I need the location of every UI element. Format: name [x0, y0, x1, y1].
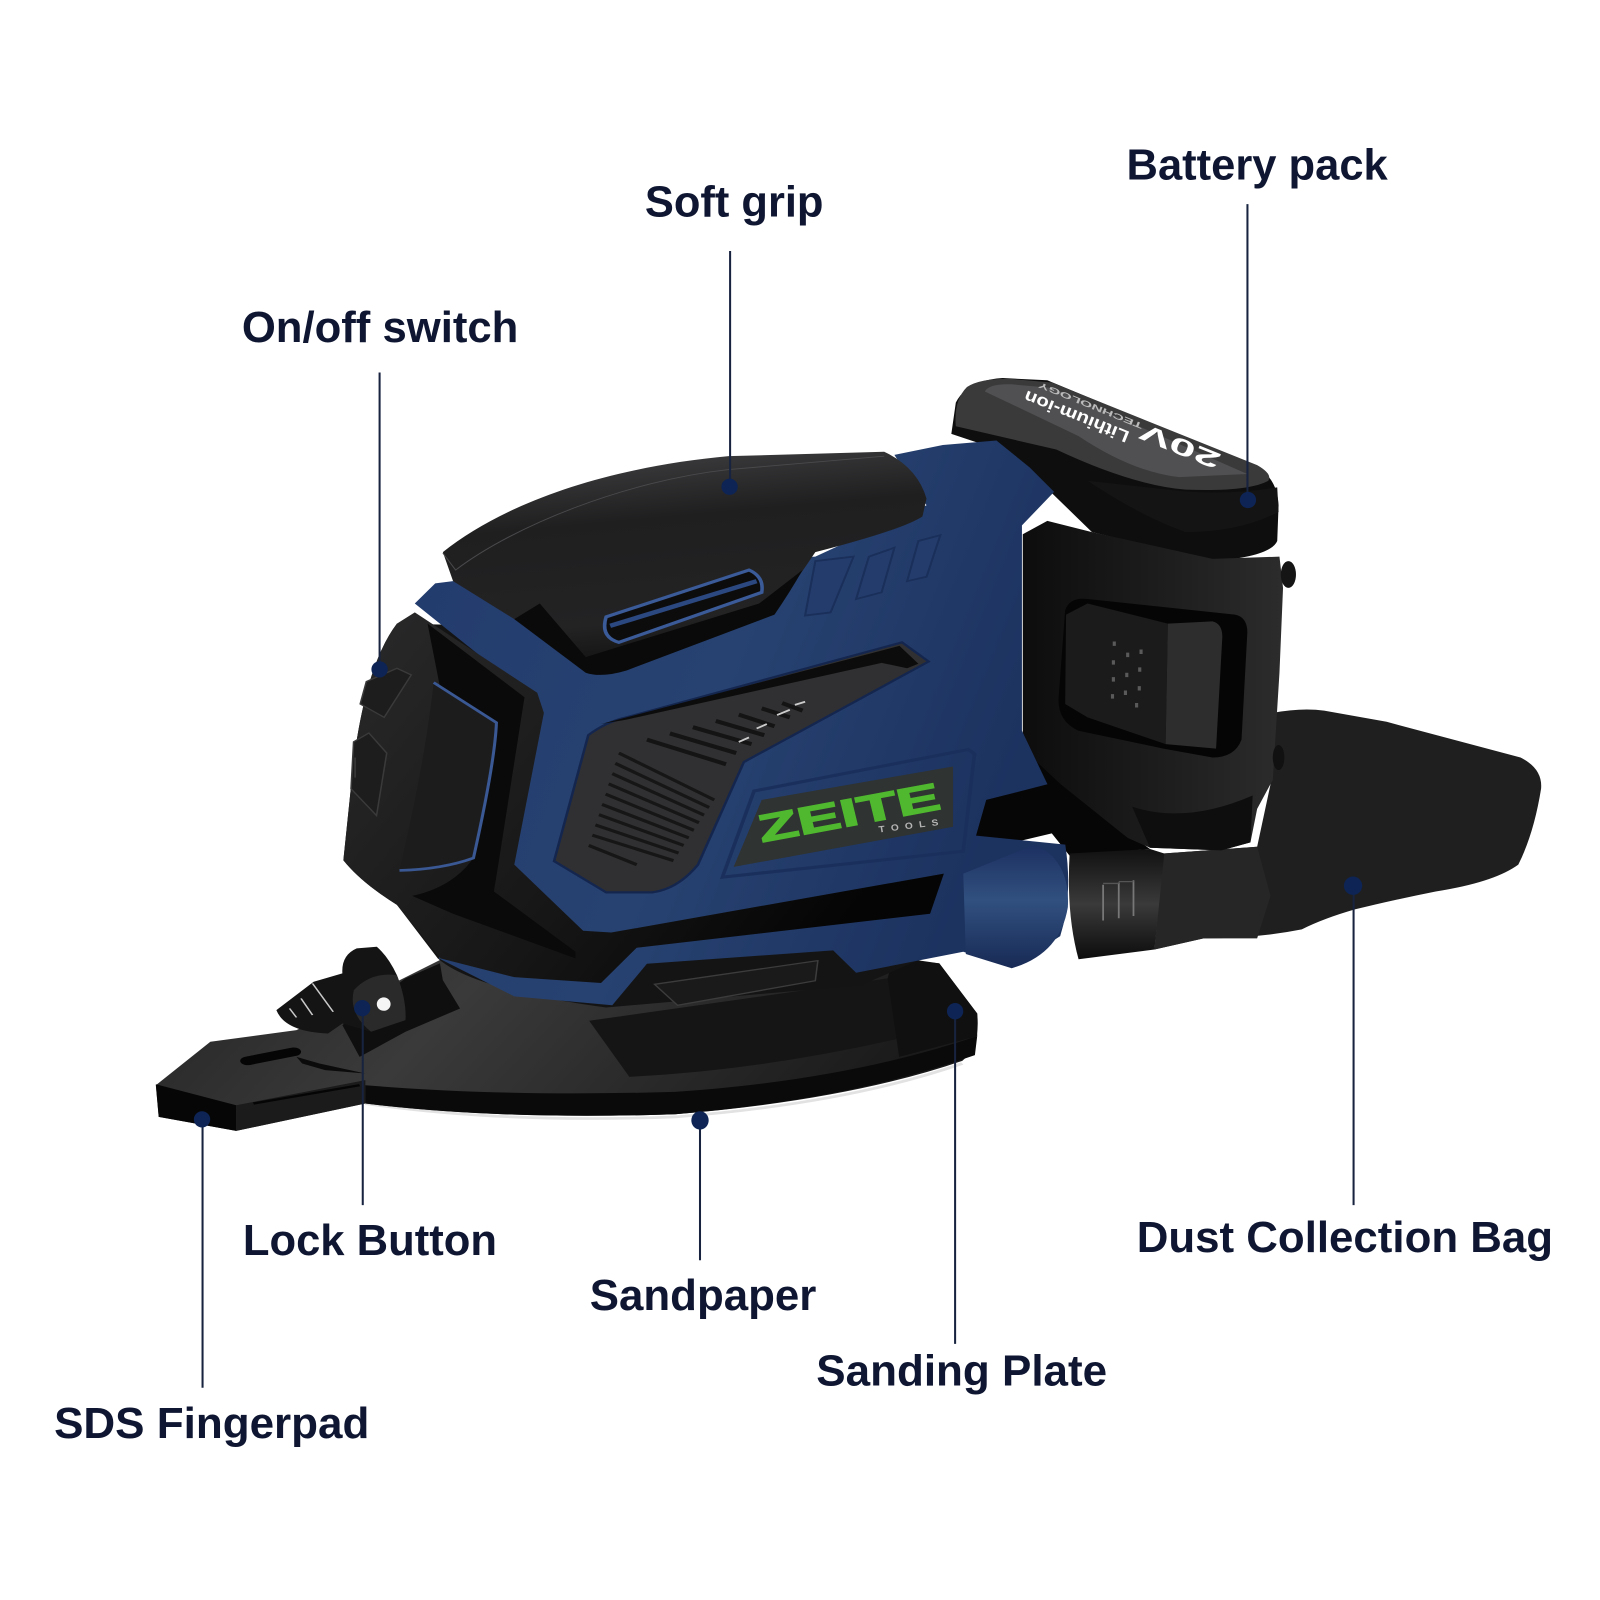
battery mount handle block — [976, 521, 1296, 856]
marker dot — [691, 1111, 709, 1130]
battery printed text: TECHNOLOGY — [1036, 380, 1144, 430]
label: battery pack: Battery pack — [1127, 141, 1388, 190]
battery printed text: 20V — [1135, 418, 1224, 474]
marker dot — [721, 479, 738, 495]
vent slot — [605, 570, 762, 642]
callout: battery pack — [1127, 141, 1388, 508]
logo badge — [722, 749, 974, 877]
lock button lever — [276, 947, 460, 1057]
dust port tube — [1069, 849, 1164, 959]
tube collar — [963, 845, 1068, 968]
leader line — [202, 1119, 204, 1388]
label: sanding plate: Sanding Plate — [816, 1347, 1107, 1396]
battery printed text — [1021, 373, 1224, 481]
textured side panel — [554, 642, 929, 892]
leader line — [1246, 204, 1248, 500]
label: lock button: Lock Button — [243, 1216, 497, 1265]
chevron vents — [805, 535, 940, 616]
marker dot — [1344, 877, 1362, 895]
leader line — [699, 1119, 701, 1260]
main blue housing — [343, 441, 1068, 1008]
leader line — [729, 251, 731, 487]
callout: on/off switch — [242, 303, 518, 678]
face window — [399, 683, 496, 870]
callout: lock button — [243, 1000, 497, 1265]
sanding base plate — [156, 947, 978, 1131]
leader line — [1353, 886, 1355, 1205]
dust collection bag — [1154, 709, 1541, 949]
ribbed grip texture — [589, 753, 714, 865]
logo badge: TOOLS — [878, 818, 940, 835]
leader line — [379, 372, 381, 669]
label: SDS fingerpad: SDS Fingerpad — [54, 1399, 369, 1448]
base wheel detail — [655, 961, 818, 1005]
soft grip dome — [443, 452, 927, 670]
leader line — [362, 1008, 364, 1205]
callout: sanding plate — [816, 1003, 1107, 1396]
battery printed text: Lithium-ion — [1021, 387, 1132, 446]
marker dot — [371, 661, 388, 678]
callout: soft grip — [645, 177, 823, 495]
marker dot — [354, 1000, 370, 1016]
marker dot — [1240, 492, 1256, 508]
battery pack — [951, 373, 1279, 561]
label: sandpaper: Sandpaper — [590, 1271, 816, 1320]
left black face — [343, 612, 944, 983]
callout: sandpaper — [590, 1111, 816, 1320]
callout: dust collection bag — [1137, 877, 1553, 1262]
marker dot — [194, 1111, 210, 1128]
on/off switch buttons — [351, 668, 411, 816]
label: on/off switch: On/off switch — [242, 303, 518, 352]
label: soft grip: Soft grip — [645, 177, 823, 226]
logo badge: ZEITE — [754, 775, 944, 851]
callout: SDS fingerpad — [54, 1111, 369, 1448]
sander illustration — [156, 373, 1541, 1131]
leader line — [954, 1011, 956, 1344]
marker dot — [947, 1003, 963, 1019]
label: dust collection bag: Dust Collection Bag — [1137, 1213, 1553, 1262]
